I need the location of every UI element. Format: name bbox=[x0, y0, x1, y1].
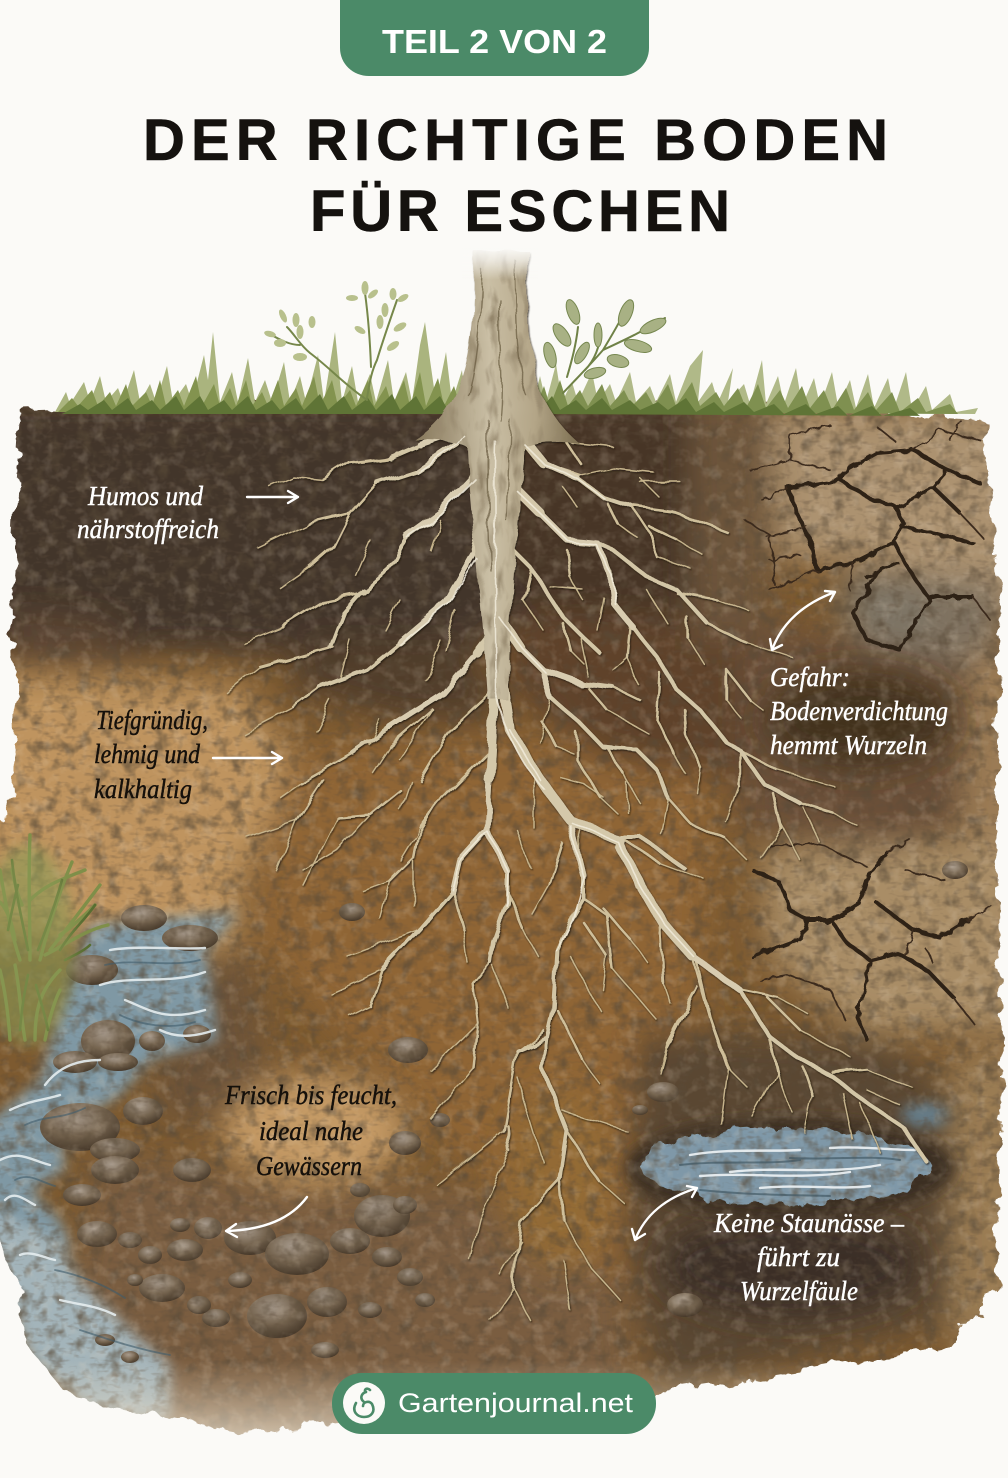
label: waterlogging: Wurzelfäule bbox=[740, 1276, 858, 1306]
small plant left leaves bbox=[263, 281, 410, 361]
footer badge bbox=[332, 1373, 656, 1434]
illustration: soil cross-section bbox=[0, 380, 1008, 1450]
grass mid blades right bbox=[534, 380, 958, 414]
trunk fade at top bbox=[462, 248, 538, 280]
label: deep loam: Tiefgründig, bbox=[96, 705, 208, 735]
pond right inlet bbox=[901, 1103, 949, 1127]
pond dark ripples bbox=[680, 1158, 900, 1196]
primary roots bbox=[473, 443, 693, 957]
icon: logo bbox=[343, 1382, 385, 1424]
label: humus: Humos und bbox=[87, 481, 203, 511]
label: moist bbox=[224, 1080, 397, 1181]
grass band: right bbox=[532, 350, 978, 416]
arrow: humus bbox=[247, 491, 298, 503]
fine cracks: lower right bbox=[760, 840, 990, 1025]
dark patch behind waterlogging label bbox=[660, 1213, 920, 1317]
title: FÜR ESCHEN bbox=[310, 179, 730, 244]
bankside grass left bbox=[0, 835, 108, 1040]
soil cracks: upper right bbox=[787, 450, 980, 650]
label: deep loam bbox=[94, 705, 208, 804]
water dark ripples bbox=[15, 960, 200, 1355]
water highlights bbox=[0, 948, 915, 1355]
root highlights bbox=[400, 438, 695, 958]
grass mid blades left bbox=[58, 372, 462, 412]
badge: part label bbox=[340, 0, 649, 76]
soft green bank wash bbox=[0, 845, 74, 1045]
arrow: compaction bbox=[770, 591, 835, 650]
dry grey patch bbox=[833, 595, 872, 636]
root system bbox=[227, 250, 925, 1320]
stream water bbox=[0, 912, 240, 1420]
soil colour layers bbox=[0, 380, 1008, 1450]
soil cracks: lower right bbox=[753, 853, 967, 1040]
fine cracks: upper right bbox=[745, 420, 990, 620]
label: compaction warning: hemmt Wurzeln bbox=[770, 730, 927, 760]
grass dark blades left bbox=[62, 394, 460, 414]
fine roots bbox=[260, 433, 867, 1287]
arrow: moist bbox=[226, 1197, 307, 1237]
label: moist: Frisch bis feucht, bbox=[224, 1080, 397, 1110]
bankside grass dark blades bbox=[8, 860, 95, 1030]
pond bbox=[625, 1103, 955, 1218]
hair roots bbox=[227, 443, 913, 1320]
label: moist: ideal nahe bbox=[259, 1116, 363, 1146]
footer text: Gartenjournal.net bbox=[398, 1388, 634, 1418]
badge text: TEIL 2 VON 2 bbox=[382, 23, 607, 60]
label: waterlogging bbox=[713, 1208, 904, 1306]
small plant right leaves bbox=[541, 298, 668, 381]
small plant right bbox=[541, 298, 668, 393]
label: humus: nährstoffreich bbox=[77, 514, 219, 544]
light patch lower centre bbox=[506, 1194, 582, 1274]
medium roots bbox=[320, 445, 925, 1179]
trunk and taproot bbox=[415, 250, 580, 700]
dark halo behind compaction label bbox=[765, 672, 955, 768]
label: compaction warning: Gefahr: bbox=[770, 662, 850, 692]
trunk bark strokes bbox=[468, 260, 526, 570]
label: waterlogging: führt zu bbox=[757, 1242, 840, 1272]
soil clod texture bbox=[0, 390, 1008, 1450]
label: compaction warning: Bodenverdichtung bbox=[770, 696, 948, 726]
grass band: left bbox=[55, 322, 466, 414]
pond highlights bbox=[690, 1147, 915, 1188]
pale soil fade at lower edge bbox=[0, 1360, 1008, 1450]
label: deep loam: kalkhaltig bbox=[94, 774, 192, 804]
grass dark blades right bbox=[536, 396, 950, 416]
label: moist: Gewässern bbox=[256, 1151, 362, 1181]
label: waterlogging: Keine Staunässe – bbox=[713, 1208, 904, 1238]
secondary roots bbox=[390, 435, 740, 990]
label: deep loam: lehmig und bbox=[94, 739, 200, 769]
title bbox=[143, 108, 888, 244]
label: humus bbox=[77, 481, 219, 544]
stones bbox=[40, 861, 968, 1363]
title: DER RICHTIGE BODEN bbox=[143, 108, 888, 173]
pale water at lower edge bbox=[0, 1210, 170, 1420]
arrow: deep loam bbox=[213, 752, 282, 764]
light patch behind lower label bbox=[223, 1074, 407, 1186]
small plant left bbox=[263, 281, 410, 400]
arrow: waterlogging bbox=[632, 1186, 697, 1240]
label: compaction warning bbox=[770, 662, 948, 760]
